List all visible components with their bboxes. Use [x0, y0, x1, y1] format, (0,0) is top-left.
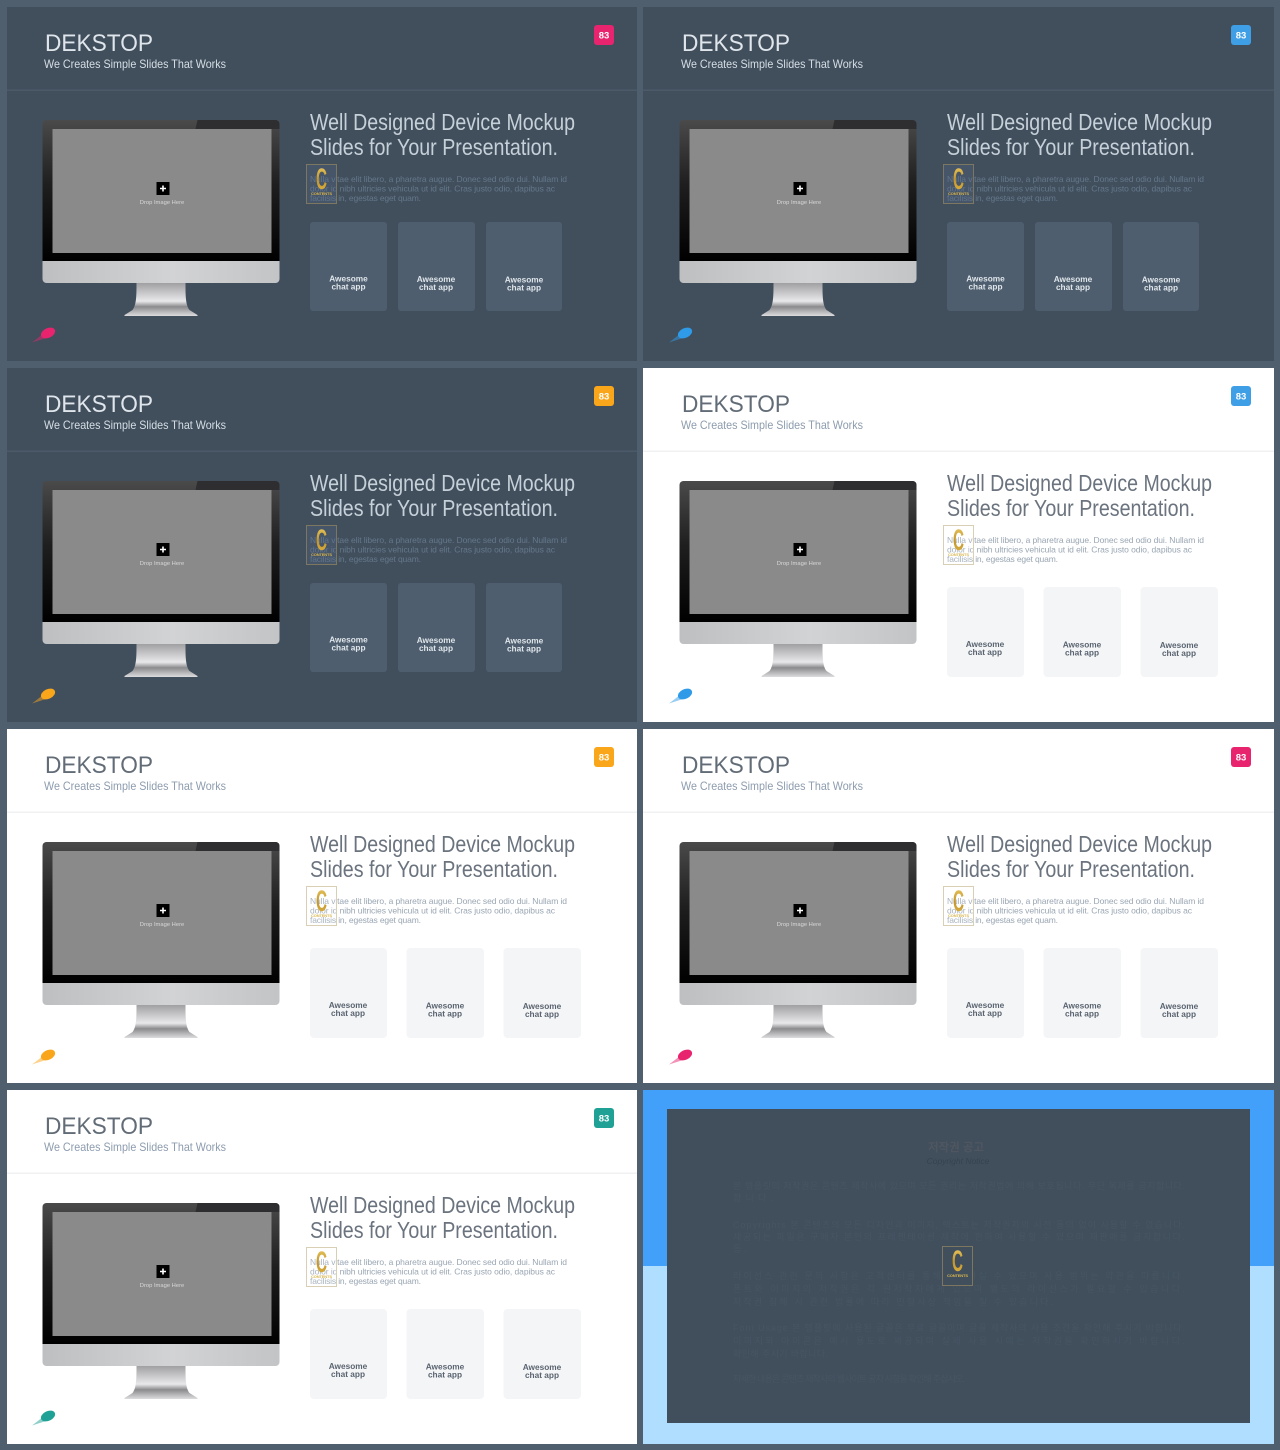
body text: dolor id nibh ultricies vehicula ut id elit. Cras justo odio, dapibus ac: [947, 544, 1193, 554]
card 1: [310, 1309, 387, 1399]
page number badge: 83: [599, 392, 609, 402]
desktop monitor mockup: Drop Image Here: [140, 200, 184, 206]
logo watermark: [944, 885, 974, 926]
card 1: Awesome: [329, 274, 368, 284]
headline: Slides for Your Presentation.: [947, 856, 1195, 882]
headline: Slides for Your Presentation.: [310, 856, 558, 882]
card 3: [1140, 948, 1218, 1038]
card 2: Awesome: [1054, 274, 1093, 284]
icon: rocket: [32, 1408, 57, 1426]
headline: Well Designed Device Mockup: [947, 109, 1212, 135]
card 1: Awesome: [966, 1000, 1005, 1010]
panel: slide 1 dark pink: [7, 7, 637, 361]
panel: slide 3 dark orange: [7, 368, 637, 722]
card 3: Awesome: [505, 636, 544, 646]
card 3: Awesome: [1142, 274, 1181, 284]
copyright body text: 확인해 주시기 바랍니다.: [733, 1348, 828, 1359]
logo watermark: C: [953, 524, 964, 557]
logo watermark: [306, 1246, 336, 1286]
body text: [947, 535, 1204, 564]
icon: rocket: [32, 686, 57, 704]
card 3: chat app: [525, 1370, 559, 1380]
page number badge: 83: [1236, 30, 1246, 42]
body text: [310, 535, 567, 564]
card 1: Awesome: [966, 639, 1005, 649]
body text: facilisis in, egestas eget quam.: [947, 915, 1058, 925]
card 2: Awesome: [1063, 640, 1102, 650]
copyright body text: 등.: [733, 1244, 747, 1254]
body text: dolor id nibh ultricies vehicula ut id elit. Cras justo odio, dapibus ac: [947, 906, 1193, 916]
page number badge: 83: [1236, 752, 1246, 764]
card 1: [310, 222, 387, 311]
subtitle: We Creates Simple Slides That Works: [44, 418, 226, 432]
logo watermark: CONTENTS: [311, 191, 332, 196]
logo watermark: [944, 524, 974, 564]
card 3: Awesome: [505, 274, 544, 284]
card 2: Awesome: [426, 1000, 465, 1010]
subtitle: We Creates Simple Slides That Works: [681, 57, 863, 71]
card 3: [1123, 222, 1199, 311]
body text: [947, 896, 1204, 925]
card 3: [504, 1309, 581, 1399]
logo watermark: C: [316, 163, 327, 196]
desktop monitor mockup: Drop Image Here: [140, 1283, 184, 1289]
headline: [310, 109, 575, 160]
card 3: chat app: [1144, 282, 1178, 292]
page number badge: 83: [599, 752, 609, 764]
headline: Slides for Your Presentation.: [947, 134, 1195, 160]
headline: [947, 831, 1212, 882]
desktop monitor mockup: Drop Image Here: [777, 200, 821, 206]
card 1: [310, 948, 387, 1038]
headline: Slides for Your Presentation.: [310, 1217, 558, 1243]
page number badge: [594, 747, 614, 767]
headline: Well Designed Device Mockup: [310, 109, 575, 135]
logo watermark: [306, 885, 336, 926]
headline: Slides for Your Presentation.: [947, 495, 1195, 521]
card 2: chat app: [1056, 282, 1090, 292]
card 3: chat app: [507, 282, 541, 292]
card 2: chat app: [419, 282, 453, 292]
page number badge: 83: [599, 30, 609, 42]
page number badge: [594, 386, 614, 406]
page number badge: [594, 25, 614, 45]
headline: [310, 1192, 575, 1243]
logo watermark: [306, 524, 336, 564]
card 1: [947, 587, 1024, 677]
title: DEKSTOP: [45, 752, 153, 779]
body text: dolor id nibh ultricies vehicula ut id elit. Cras justo odio, dapibus ac: [947, 184, 1193, 194]
icon: rocket: [669, 1047, 694, 1064]
icon: rocket: [669, 686, 694, 704]
desktop monitor mockup: [42, 481, 280, 677]
headline: Well Designed Device Mockup: [310, 1192, 575, 1218]
logo watermark: [944, 163, 974, 204]
body text: facilisis in, egestas eget quam.: [310, 915, 421, 925]
card 3: Awesome: [1160, 640, 1199, 650]
card 2: chat app: [1065, 1008, 1099, 1018]
logo watermark: CONTENTS: [948, 552, 969, 557]
card 2: chat app: [428, 1008, 462, 1018]
body text: facilisis in, egestas eget quam.: [947, 554, 1058, 564]
card 3: [504, 948, 581, 1038]
copyright body text: 이미지와 아이콘은 예시 용도로 제공되며 실제 사용 시에는 저작권을 확인하시기 바랍니다.: [733, 1335, 1185, 1346]
title: DEKSTOP: [45, 30, 153, 57]
card 1: chat app: [968, 282, 1003, 292]
body text: [310, 896, 567, 925]
headline: [947, 109, 1212, 160]
panel: slide 7 light teal: [7, 1090, 637, 1444]
logo watermark: CONTENTS: [948, 913, 969, 918]
headline: Well Designed Device Mockup: [947, 470, 1212, 496]
body text: Nulla vitae elit libero, a pharetra augue. Donec sed odio dui. Nullam id: [310, 535, 567, 545]
card 2: chat app: [419, 643, 453, 653]
card 2: [1035, 222, 1112, 311]
copyright heading: 저작권 공고: [928, 1140, 984, 1154]
copyright body text: Font Usage 본 템플릿에 사용된 글꼴은 무료 글꼴이며 글꼴 제작사의 사용 조건을 확인해 주시기 바랍니다.: [733, 1322, 1185, 1333]
card 3: Awesome: [523, 1001, 562, 1011]
desktop monitor mockup: [42, 842, 280, 1038]
page number badge: [594, 1108, 614, 1128]
card 1: Awesome: [329, 1000, 368, 1010]
card 2: Awesome: [417, 635, 456, 645]
copyright body text: [733, 1180, 1185, 1384]
headline: [310, 470, 575, 521]
card 3: Awesome: [523, 1362, 562, 1372]
card 3: chat app: [507, 644, 541, 654]
card 2: chat app: [1065, 648, 1099, 658]
card 2: Awesome: [1063, 1000, 1102, 1010]
card 2: [406, 948, 484, 1038]
copyright body text: 자세한 내용은 콘텐츠 제작사의 웹사이트 공지 사항을 확인해 주십시오.: [733, 1373, 965, 1384]
desktop monitor mockup: Drop Image Here: [140, 922, 184, 928]
page number badge: [1231, 25, 1251, 45]
panel: slide 5 light orange: [7, 729, 637, 1083]
headline: Slides for Your Presentation.: [310, 134, 558, 160]
panel: copyright notice: [643, 1090, 1274, 1444]
logo watermark: CONTENTS: [311, 1274, 332, 1279]
logo watermark: CONTENTS: [311, 913, 332, 918]
body text: dolor id nibh ultricies vehicula ut id elit. Cras justo odio, dapibus ac: [310, 906, 556, 916]
headline: [947, 470, 1212, 521]
body text: facilisis in, egestas eget quam.: [310, 1276, 421, 1286]
desktop monitor mockup: [680, 120, 916, 316]
icon: rocket: [32, 1047, 57, 1064]
logo: CONTENTS: [947, 1273, 968, 1278]
body text: facilisis in, egestas eget quam.: [310, 554, 421, 564]
copyright body text: 라이선스 관련 문의 사항은 고객센터를 통해 확인하실 수 있으며 사용 범위는 약관을 따릅니다.: [733, 1270, 1185, 1281]
logo watermark: CONTENTS: [311, 552, 332, 557]
card 1: chat app: [331, 1008, 365, 1018]
page number badge: [1231, 386, 1251, 406]
body text: Nulla vitae elit libero, a pharetra augue. Donec sed odio dui. Nullam id: [947, 535, 1204, 545]
card 2: Awesome: [426, 1362, 465, 1372]
body text: Nulla vitae elit libero, a pharetra augue. Donec sed odio dui. Nullam id: [310, 1257, 567, 1267]
logo watermark: C: [953, 163, 964, 196]
subtitle: We Creates Simple Slides That Works: [44, 1140, 226, 1154]
panel: slide 4 light blue: [643, 368, 1274, 722]
logo watermark: C: [953, 885, 964, 918]
headline: Well Designed Device Mockup: [310, 831, 575, 857]
desktop monitor mockup: [42, 120, 280, 316]
headline: Well Designed Device Mockup: [947, 831, 1212, 857]
card 2: [398, 583, 475, 672]
body text: [947, 174, 1204, 203]
card 1: chat app: [331, 282, 366, 292]
page number badge: [1231, 747, 1251, 767]
copyright body text: 합니다.: [733, 1193, 773, 1203]
card 3: Awesome: [1160, 1001, 1199, 1011]
panel: slide 6 light pink: [643, 729, 1274, 1083]
title: DEKSTOP: [45, 391, 153, 418]
copyright body text: 저작권 침해 시 관련 법률에 따라 민형사상 책임을 질 수 있습니다.: [733, 1296, 1053, 1307]
desktop monitor mockup: [680, 481, 916, 677]
subtitle: We Creates Simple Slides That Works: [681, 779, 863, 793]
page number badge: 83: [599, 1114, 609, 1124]
title: DEKSTOP: [682, 30, 790, 57]
logo: C: [952, 1245, 963, 1278]
body text: dolor id nibh ultricies vehicula ut id elit. Cras justo odio, dapibus ac: [310, 544, 556, 554]
body text: Nulla vitae elit libero, a pharetra augue. Donec sed odio dui. Nullam id: [310, 896, 567, 906]
card 1: chat app: [331, 642, 366, 652]
card 1: Awesome: [966, 274, 1005, 284]
icon: rocket: [669, 325, 694, 342]
card 1: [947, 948, 1024, 1038]
desktop monitor mockup: Drop Image Here: [777, 922, 821, 928]
copyright body text: Copyrights 본 콘텐츠의 모든 디자인과 이미지, 텍스트는 저작권자의 사전 동의 없이 사용할 수 없습니다.: [733, 1219, 1185, 1230]
body text: dolor id nibh ultricies vehicula ut id elit. Cras justo odio, dapibus ac: [310, 1266, 556, 1276]
logo watermark: C: [316, 524, 327, 557]
body text: dolor id nibh ultricies vehicula ut id elit. Cras justo odio, dapibus ac: [310, 184, 556, 194]
card 1: chat app: [331, 1369, 365, 1379]
copyright body text: 폰트와 이미지의 저작권은 각 원저작자에게 있으며 별도의 라이선스가 필요할 수 있습니다.: [733, 1283, 1185, 1294]
logo watermark: C: [316, 1246, 327, 1279]
copyright body text: 제공되는 파일은 구매자 본인의 프레젠테이션 제작에 한하여 사용할 수 있으며 재판매를 금지합니다.: [733, 1231, 1185, 1242]
card 1: chat app: [968, 1008, 1002, 1018]
card 3: [1140, 587, 1218, 677]
card 1: chat app: [968, 647, 1002, 657]
card 3: chat app: [1162, 648, 1196, 658]
body text: Nulla vitae elit libero, a pharetra augue. Donec sed odio dui. Nullam id: [947, 896, 1204, 906]
card 1: [310, 583, 387, 672]
body text: [310, 1257, 567, 1286]
desktop monitor mockup: [42, 1203, 280, 1399]
title: DEKSTOP: [682, 752, 790, 779]
body text: Nulla vitae elit libero, a pharetra augue. Donec sed odio dui. Nullam id: [947, 174, 1204, 184]
page number badge: 83: [1236, 392, 1246, 402]
card 3: [486, 222, 562, 311]
copyright body text: 본 템플릿의 저작권은 콘텐츠 제작사에 있으며 모든 권리는 저작권법에 의해 보호됩니다. 무단 복제를 금지합니다.: [733, 1180, 1185, 1191]
title: DEKSTOP: [45, 1113, 153, 1140]
headline: [310, 831, 575, 882]
panel: slide 2 dark blue: [643, 7, 1274, 361]
icon: rocket: [32, 325, 57, 342]
card 3: [486, 583, 562, 672]
headline: Slides for Your Presentation.: [310, 495, 558, 521]
logo watermark: C: [316, 885, 327, 918]
subtitle: We Creates Simple Slides That Works: [44, 57, 226, 71]
title: DEKSTOP: [682, 391, 790, 418]
copyright subheading: Copyright Notice: [927, 1156, 990, 1166]
body text: facilisis in, egestas eget quam.: [947, 193, 1058, 203]
subtitle: We Creates Simple Slides That Works: [44, 779, 226, 793]
card 2: [1044, 587, 1121, 677]
card 2: Awesome: [417, 274, 456, 284]
subtitle: We Creates Simple Slides That Works: [681, 418, 863, 432]
logo watermark: [306, 163, 336, 204]
headline: Well Designed Device Mockup: [310, 470, 575, 496]
body text: facilisis in, egestas eget quam.: [310, 193, 421, 203]
desktop monitor mockup: Drop Image Here: [140, 561, 184, 567]
logo: [942, 1245, 972, 1286]
card 1: Awesome: [329, 634, 368, 644]
card 3: chat app: [525, 1009, 559, 1019]
card 1: [947, 222, 1024, 311]
card 2: [406, 1309, 484, 1399]
body text: [310, 174, 567, 203]
card 2: chat app: [428, 1370, 462, 1380]
card 2: [398, 222, 475, 311]
desktop monitor mockup: [680, 842, 916, 1038]
card 1: Awesome: [329, 1361, 368, 1371]
logo watermark: CONTENTS: [948, 191, 969, 196]
card 2: [1044, 948, 1121, 1038]
card 3: chat app: [1162, 1009, 1196, 1019]
desktop monitor mockup: Drop Image Here: [777, 561, 821, 567]
body text: Nulla vitae elit libero, a pharetra augue. Donec sed odio dui. Nullam id: [310, 174, 567, 184]
